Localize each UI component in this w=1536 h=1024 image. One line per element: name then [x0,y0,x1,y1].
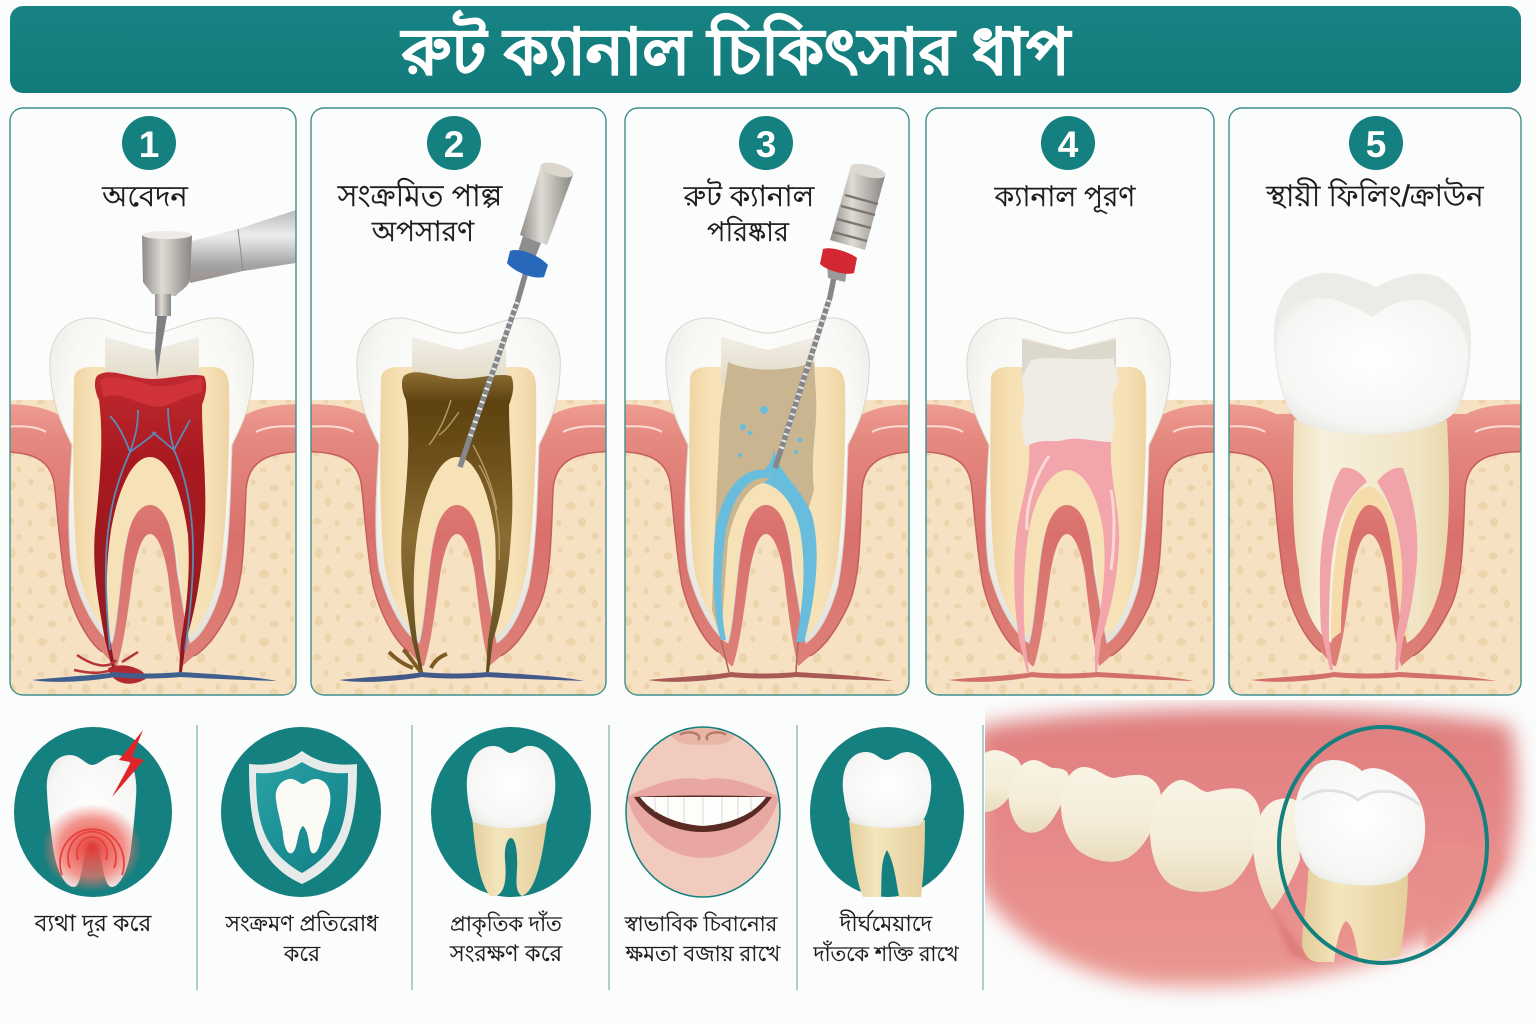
label: প্রাকৃতিক দাঁত [450,911,563,937]
step number 4: 4 [1058,124,1079,165]
gums [975,709,1517,987]
panel: step 5 permanent crown [1228,107,1522,696]
benefit: maintains chewing ability [620,725,790,966]
panel: step 2 remove infected pulp [310,107,607,696]
label: দীর্ঘমেয়াদে [839,910,933,936]
label: স্বাভাবিক চিবানোর [624,912,778,936]
step number 4 [1041,116,1095,170]
label: সংরক্ষণ করে [449,941,563,966]
benefit: long-term strength [810,727,964,966]
panel: step 1 anesthesia [9,107,297,696]
title: রুট ক্যানাল চিকিৎসার ধাপ [400,10,1072,88]
photo: restored tooth in jaw [975,709,1517,987]
label: ব্যথা দূর করে [34,910,152,937]
icon: endodontic file red [775,161,887,468]
icon: endodontic file blue [460,160,575,467]
benefit: relieves pain [14,727,172,937]
benefit: prevents infection [221,727,381,966]
step label: ক্যানাল পূরণ [994,181,1136,214]
label [624,912,781,966]
tooth illustration with filled canals [926,318,1214,694]
step number 2 [427,116,481,170]
label [449,911,563,966]
restored molar [1295,760,1425,964]
step number 5 [1349,116,1403,170]
title banner [10,6,1521,93]
icon: tooth with pain [14,727,172,897]
tooth illustration with crown [1230,272,1520,694]
step number 3: 3 [756,124,776,165]
panel: step 4 canal filling [925,107,1215,696]
step label: অপসারণ [371,216,475,247]
panel: step 3 canal cleaning [624,107,910,696]
step label: স্থায়ী ফিলিং/ক্রাউন [1265,177,1485,213]
tooth illustration with brown pulp [312,162,606,694]
icon: smile [620,725,790,900]
label: দাঁতকে শক্তি রাখে [813,941,960,966]
label [813,910,960,966]
step label [337,178,503,247]
tooth illustration with inflamed pulp [10,210,296,694]
icon: natural tooth [431,727,591,897]
tooth illustration with irrigating fluid [626,164,908,694]
neighbouring teeth [985,750,1300,910]
step number 5: 5 [1366,124,1386,165]
icon: strong tooth [810,727,964,897]
icon: dental handpiece [142,210,296,378]
benefit: preserves natural tooth [431,727,591,966]
highlight ring [1279,727,1487,963]
label: ক্ষমতা বজায় রাখে [625,942,781,966]
label: সংক্রমণ প্রতিরোধ [225,911,379,936]
step number 3 [739,116,793,170]
label [225,911,379,966]
step label: অবেদন [101,181,188,213]
step label [683,178,815,247]
step label: সংক্রমিত পাল্প [337,178,503,213]
step number 1 [122,116,176,170]
label: করে [283,941,321,966]
step number 1: 1 [139,124,159,165]
step label: রুট ক্যানাল [683,178,815,213]
icon: shield and tooth [221,727,381,897]
step label: পরিষ্কার [707,216,790,247]
step number 2: 2 [444,124,464,165]
crown [1274,273,1471,434]
